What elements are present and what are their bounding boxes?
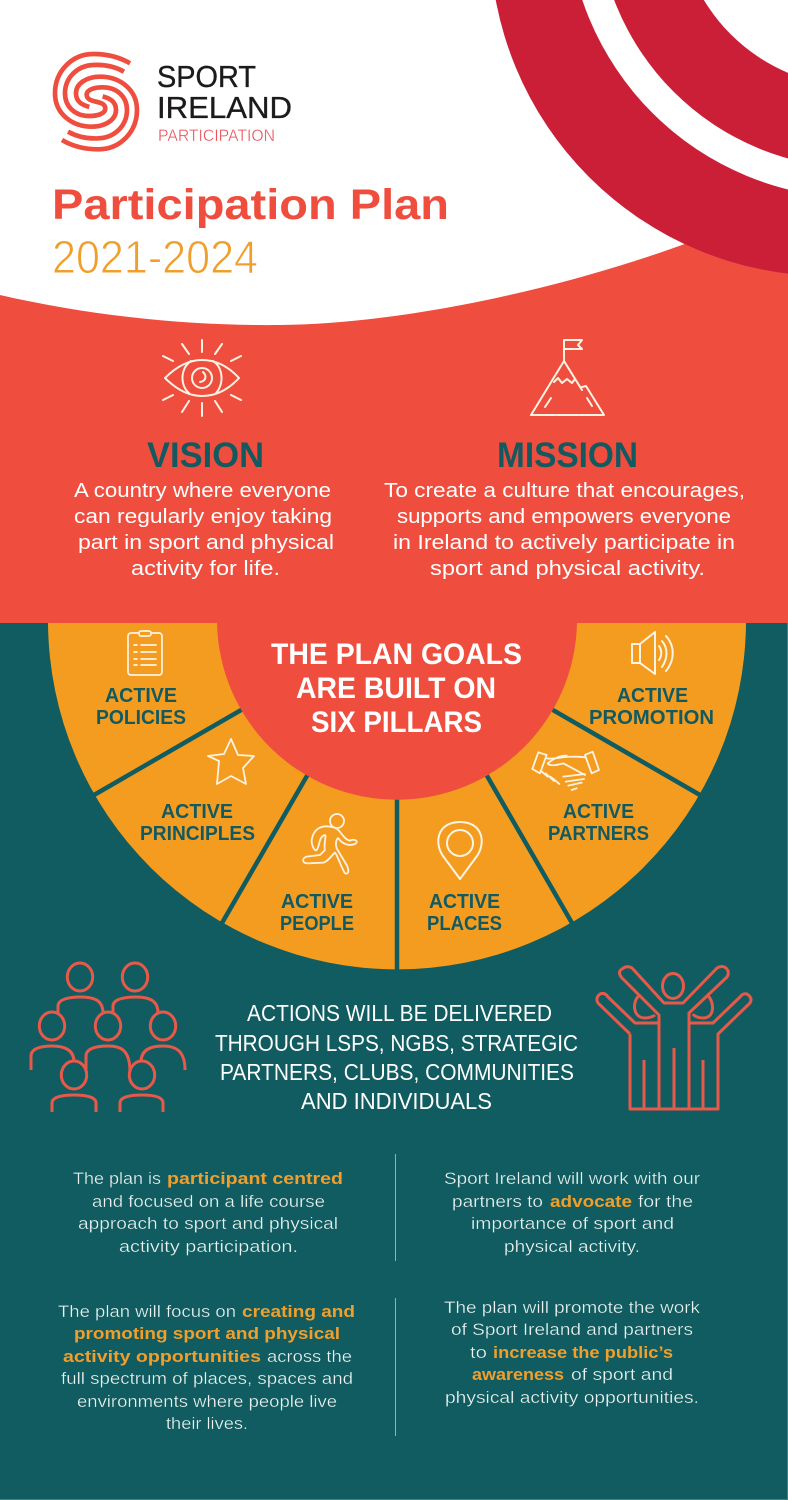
pillar: active promotion: PROMOTION [589, 707, 714, 729]
decorative crimson concentric arcs [490, 0, 788, 276]
icon: eye [163, 340, 241, 416]
panel: teal lower section [0, 623, 788, 1500]
text block: advocate: importance of sport and [471, 1214, 674, 1233]
icon: runner [303, 814, 357, 874]
text block: participant centred: and focused on a life course [92, 1192, 325, 1211]
icon: clipboard [128, 631, 162, 675]
text block: public awareness: of Sport Ireland and partners [451, 1320, 693, 1339]
pillar: active principles [140, 739, 255, 845]
heading: plan goals: ARE BUILT ON [296, 672, 496, 705]
icon: map pin [438, 822, 482, 879]
panel: white header background [0, 0, 788, 330]
text block: public awareness: to [470, 1343, 487, 1362]
pillar: active people [280, 814, 357, 935]
pillar: active people: ACTIVE [281, 891, 353, 913]
pillar: active principles: ACTIVE [161, 801, 233, 823]
pillar: active partners: PARTNERS [548, 823, 649, 845]
text block: vision statement [74, 480, 334, 580]
text block: public awareness: awareness [472, 1365, 564, 1384]
text block: mission statement: To create a culture that encourages, [384, 480, 745, 502]
heading: plan goals: THE PLAN GOALS [271, 638, 522, 671]
pillar: active places: PLACES [427, 913, 502, 935]
text block: participant centred: participant centred [167, 1169, 343, 1188]
pillar: active policies [96, 631, 186, 729]
pillar: active places: ACTIVE [429, 891, 500, 913]
pillar: active promotion [589, 632, 714, 729]
subtitle: years: 2021-2024 [52, 231, 258, 283]
text block: advocate: partners to [452, 1192, 543, 1211]
text block: creating and promoting opportunities: promoting sport and physical [74, 1324, 340, 1343]
text block: public awareness: The plan will promote the work [444, 1298, 701, 1317]
pillar: active partners [532, 752, 649, 845]
pillar: active places [427, 822, 502, 935]
pillar: active principles: PRINCIPLES [140, 823, 255, 845]
heading: plan goals [271, 638, 522, 739]
text block: mission statement [384, 480, 745, 580]
text block: public awareness: physical activity opportunities. [445, 1388, 699, 1407]
text block: vision statement: part in sport and physical [78, 532, 334, 554]
text block: creating and promoting opportunities: environments where people live [77, 1392, 337, 1411]
text block: creating and promoting opportunities: full spectrum of places, spaces and [61, 1369, 353, 1388]
logo wordmark: SPORT [157, 59, 256, 94]
text block: mission statement: sport and physical activity. [430, 558, 705, 580]
text block: public awareness: increase the public’s [493, 1343, 673, 1362]
heading: plan goals: SIX PILLARS [311, 706, 482, 739]
icon: people with raised arms [597, 966, 751, 1109]
centre circle [217, 623, 577, 800]
pillar: active people: PEOPLE [280, 913, 354, 935]
text block: participant centred: approach to sport and physical [78, 1214, 338, 1233]
text block: advocate: advocate [550, 1192, 632, 1211]
icon: spiral S logo mark [55, 54, 137, 149]
icon: star [208, 739, 254, 784]
chart: six pillars semicircle [48, 623, 746, 972]
text block: mission statement: in Ireland to actively participate in [393, 532, 735, 554]
icon: group of people [31, 963, 185, 1112]
logo wordmark [157, 59, 292, 145]
heading: vision: VISION [147, 436, 264, 475]
text block: vision statement: A country where everyone [74, 480, 331, 502]
text block: advocate: physical activity. [504, 1237, 640, 1256]
heading: mission: MISSION [497, 436, 638, 475]
text block: creating and promoting opportunities: The plan will focus on [58, 1302, 236, 1321]
text block: creating and promoting opportunities: activity opportunities [63, 1347, 261, 1366]
text block: actions delivered: ACTIONS WILL BE DELIVERED [247, 1000, 552, 1026]
text block: actions delivered: THROUGH LSPS, NGBS, STRATEGIC [215, 1030, 578, 1056]
text block: creating and promoting opportunities: their lives. [166, 1414, 248, 1433]
logo: Sport Ireland Participation [55, 54, 292, 149]
logo wordmark: PARTICIPATION [158, 126, 275, 145]
pillar: active policies: POLICIES [96, 707, 186, 729]
icon: mountain with flag [531, 340, 604, 415]
text block: actions delivered: PARTNERS, CLUBS, COMMUNITIES [220, 1059, 574, 1085]
icon: speaker [632, 632, 673, 674]
icon: handshake [532, 752, 599, 790]
pillar: active promotion: ACTIVE [617, 685, 688, 707]
text block: mission statement: supports and empowers everyone [397, 506, 731, 528]
title: Participation Plan [52, 181, 449, 229]
text block: advocate: Sport Ireland will work with our [444, 1169, 700, 1188]
text block: vision statement: activity for life. [131, 558, 280, 580]
panel: red vision and mission band [0, 200, 788, 624]
text block: creating and promoting opportunities: across the [267, 1347, 352, 1366]
text block: creating and promoting opportunities: creating and [242, 1302, 355, 1321]
pillar: active partners: ACTIVE [563, 801, 634, 823]
text block: participant centred: The plan is [73, 1169, 161, 1188]
text block: actions delivered: AND INDIVIDUALS [301, 1088, 492, 1114]
text block: advocate: for the [638, 1192, 693, 1211]
text block: participant centred: activity participation. [119, 1237, 298, 1256]
logo wordmark: IRELAND [157, 90, 292, 125]
text block: public awareness: of sport and [571, 1365, 673, 1384]
pillar: active policies: ACTIVE [105, 685, 177, 707]
text block: vision statement: can regularly enjoy taking [74, 506, 332, 528]
text block: actions delivered [215, 1000, 578, 1114]
